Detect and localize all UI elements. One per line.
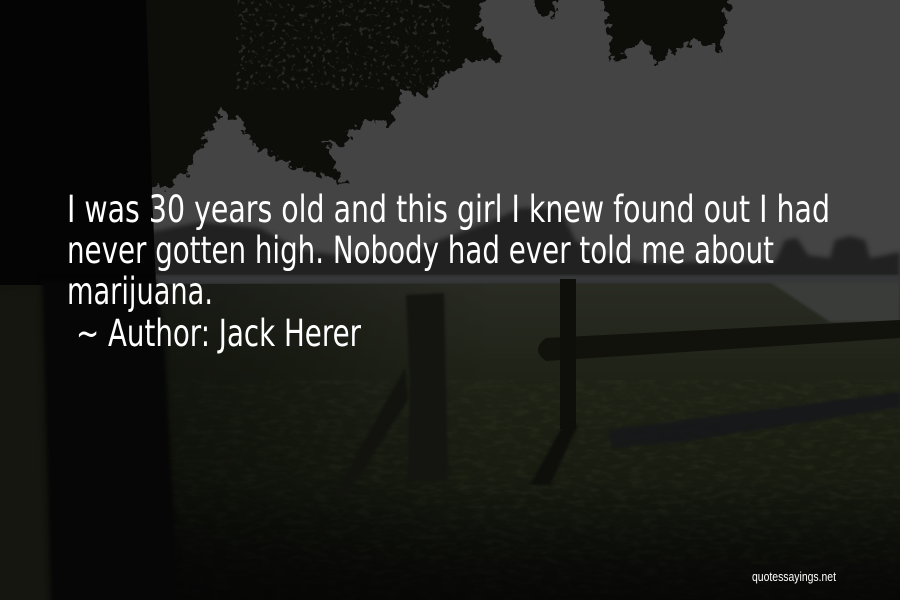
tree foliage <box>130 0 740 190</box>
fence: right post <box>560 279 576 429</box>
background: field <box>157 285 900 568</box>
fence: lower rail <box>608 392 900 448</box>
fence: rear rail <box>538 320 900 361</box>
tree trunk upper <box>0 0 156 285</box>
foliage: central hanging cluster <box>590 0 740 62</box>
background: distant tree line <box>150 208 900 290</box>
quote text <box>67 188 830 313</box>
watermark: quotessayings.net <box>752 569 836 584</box>
author line: ~ Author: Jack Herer <box>76 312 362 355</box>
fence: right brace <box>530 425 578 485</box>
fence: left brace <box>352 372 408 466</box>
tree trunk lower <box>42 279 171 574</box>
quote text: marijuana. <box>67 270 213 313</box>
foliage: sky specks <box>235 0 450 90</box>
background: pale far meadow <box>770 282 900 322</box>
foliage: small cluster <box>534 0 559 20</box>
background: grass texture <box>332 381 898 516</box>
background: bottom shadow <box>220 532 900 600</box>
left undergrowth <box>0 364 50 600</box>
fence: left post <box>406 293 448 482</box>
background: dusk sky <box>152 0 900 284</box>
background: foreground shadow <box>0 284 350 528</box>
background: far house band <box>150 275 900 284</box>
